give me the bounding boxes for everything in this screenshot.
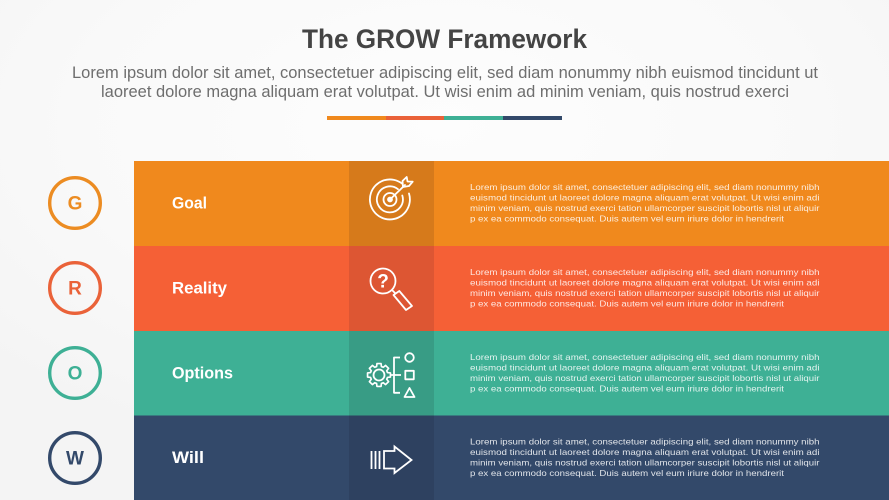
Reality description <box>470 267 820 308</box>
Reality description: euismod tincidunt ut laoreet dolore magna aliquam erat volutpat. Ut wisi enim adi <box>470 278 820 288</box>
Goal description <box>470 182 820 224</box>
row: Reality <box>50 246 889 331</box>
Options description: minim veniam, quis nostrud exerci tation ullamcorper suscipit lobortis nisl ut aliquir <box>470 373 820 383</box>
Will label: Will <box>172 448 204 467</box>
Reality icon column <box>349 246 434 331</box>
subtitle text block: Lorem ipsum dolor sit amet, consectetuer adipiscing elit, sed diam nonummy nibh euismod tincidunt ut <box>72 64 818 82</box>
Goal icon column <box>349 161 434 246</box>
Will band <box>134 416 889 500</box>
title underline colour bar <box>327 116 562 120</box>
Options description: p ex ea commodo consequat. Duis autem vel eum iriure dolor in hendrerit <box>470 384 785 394</box>
Options band <box>134 331 889 416</box>
Goal band <box>134 161 889 246</box>
Will description: euismod tincidunt ut laoreet dolore magna aliquam erat volutpat. Ut wisi enim adi <box>470 447 820 457</box>
icon: target with arrow <box>370 177 413 219</box>
title: The GROW Framework <box>302 24 588 54</box>
Options description <box>470 352 820 394</box>
subtitle text block <box>72 64 818 101</box>
icon: magnifier with question mark: ? <box>377 272 389 292</box>
row: Will <box>50 416 889 500</box>
Options badge <box>50 348 100 398</box>
Goal badge: G <box>68 194 82 215</box>
Reality badge: R <box>68 279 82 300</box>
Will badge: W <box>66 449 84 470</box>
Options description: Lorem ipsum dolor sit amet, consectetuer adipiscing elit, sed diam nonummy nibh <box>470 352 820 362</box>
Reality description: minim veniam, quis nostrud exerci tation ullamcorper suscipit lobortis nisl ut aliquir <box>470 288 820 298</box>
icon: gear with option shapes <box>368 353 414 397</box>
row: Goal <box>50 161 889 246</box>
Reality badge <box>50 263 100 313</box>
Options badge: O <box>68 364 82 385</box>
Goal description: minim veniam, quis nostrud exerci tation ullamcorper suscipit lobortis nisl ut aliquir <box>470 203 820 213</box>
Reality label: Reality <box>172 278 228 298</box>
Reality description: p ex ea commodo consequat. Duis autem vel eum iriure dolor in hendrerit <box>470 298 785 308</box>
Will badge <box>50 433 100 483</box>
Will description: Lorem ipsum dolor sit amet, consectetuer adipiscing elit, sed diam nonummy nibh <box>470 436 820 446</box>
Reality description: Lorem ipsum dolor sit amet, consectetuer adipiscing elit, sed diam nonummy nibh <box>470 267 820 277</box>
Will description: p ex ea commodo consequat. Duis autem vel eum iriure dolor in hendrerit <box>470 468 785 478</box>
Goal badge <box>50 178 100 228</box>
icon: magnifier with question mark <box>370 268 412 310</box>
Goal description: Lorem ipsum dolor sit amet, consectetuer adipiscing elit, sed diam nonummy nibh <box>470 182 820 192</box>
Options icon column <box>349 331 434 416</box>
Goal description: p ex ea commodo consequat. Duis autem vel eum iriure dolor in hendrerit <box>470 214 785 224</box>
row: Options <box>50 331 889 416</box>
Will icon column <box>349 416 434 500</box>
Reality band <box>134 246 889 331</box>
subtitle text block: laoreet dolore magna aliquam erat volutpat. Ut wisi enim ad minim veniam, quis nostrud exerci <box>101 83 789 101</box>
Will description: minim veniam, quis nostrud exerci tation ullamcorper suscipit lobortis nisl ut aliquir <box>470 458 820 468</box>
Goal description: euismod tincidunt ut laoreet dolore magna aliquam erat volutpat. Ut wisi enim adi <box>470 192 820 202</box>
Will description <box>470 436 820 478</box>
icon: arrow with speed lines <box>372 446 412 473</box>
Options label: Options <box>172 364 233 382</box>
Options description: euismod tincidunt ut laoreet dolore magna aliquam erat volutpat. Ut wisi enim adi <box>470 362 820 372</box>
Goal label: Goal <box>172 194 207 212</box>
